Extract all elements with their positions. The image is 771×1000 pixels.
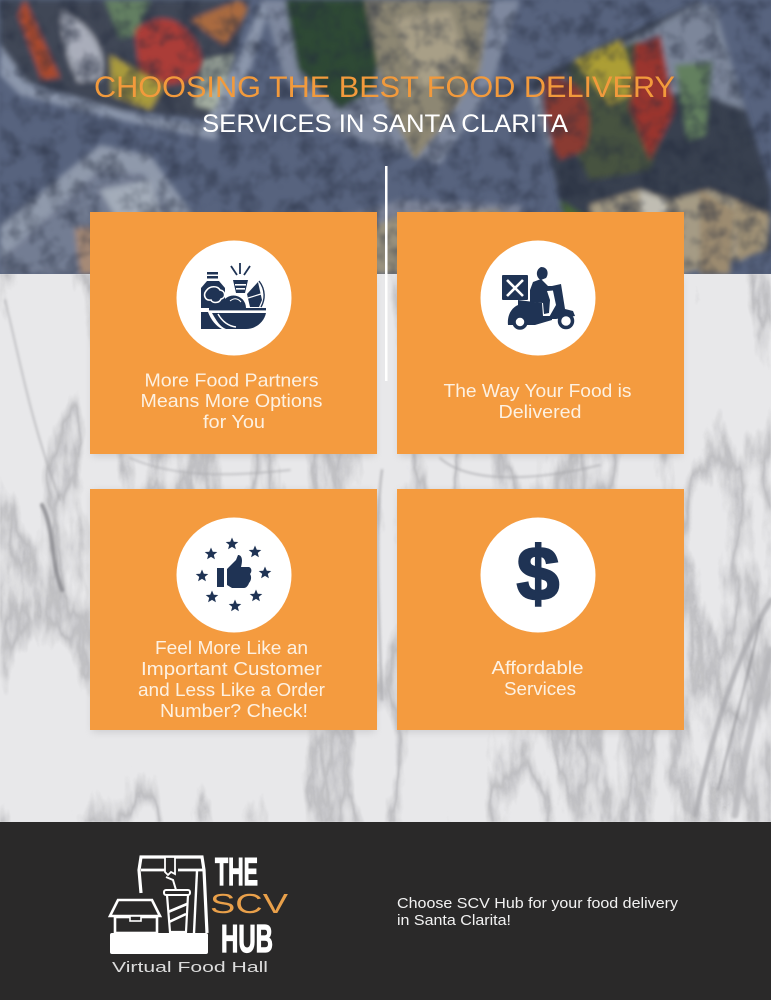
card text: Feel More Like an — [155, 638, 308, 658]
card text: for You — [203, 412, 265, 432]
card text: Number? Check! — [160, 701, 308, 721]
logo wordmark: THE — [215, 851, 258, 894]
title line 1: CHOOSING THE BEST FOOD DELIVERY — [94, 71, 675, 104]
card text: The Way Your Food is — [443, 381, 631, 401]
card text: Delivered — [498, 402, 582, 422]
card text: Means More Options — [140, 391, 322, 411]
panel: more food partners — [90, 212, 377, 454]
title line 2: SERVICES IN SANTA CLARITA — [202, 110, 568, 138]
top-center tray — [262, 0, 520, 165]
card shadows — [92, 278, 682, 732]
logo: SCV — [210, 888, 288, 919]
panel: affordable — [397, 489, 684, 730]
icon: thumbs up with stars — [196, 538, 271, 611]
card text: and Less Like a Order — [138, 680, 325, 700]
background: food photo band — [0, 0, 771, 274]
card text: More Food Partners — [144, 370, 318, 390]
right tray — [532, 0, 771, 274]
footer text: Choose SCV Hub for your food delivery — [397, 896, 679, 912]
top-left tray — [0, 0, 250, 120]
bottom-left tray — [0, 150, 225, 274]
card text: Affordable — [491, 658, 583, 678]
logo wordmark: HUB — [221, 918, 273, 961]
logo: Virtual Food Hall — [112, 959, 268, 976]
footer band — [0, 822, 771, 1000]
title — [94, 71, 675, 138]
logo icon: food containers — [110, 857, 208, 954]
footer text: in Santa Clarita! — [397, 913, 511, 929]
panel: important customer — [90, 489, 377, 730]
background: marble — [0, 274, 771, 822]
icon: dollar sign: $ — [517, 532, 559, 617]
card text: Services — [504, 679, 576, 699]
icon: delivery scooter — [502, 267, 575, 328]
icon: food bowl — [201, 263, 266, 329]
panel: delivery — [397, 212, 684, 454]
logo — [110, 851, 288, 976]
bottom-center tray — [262, 200, 560, 274]
divider line — [385, 166, 388, 381]
card text: Important Customer — [141, 659, 322, 679]
logo wordmark — [215, 851, 273, 961]
